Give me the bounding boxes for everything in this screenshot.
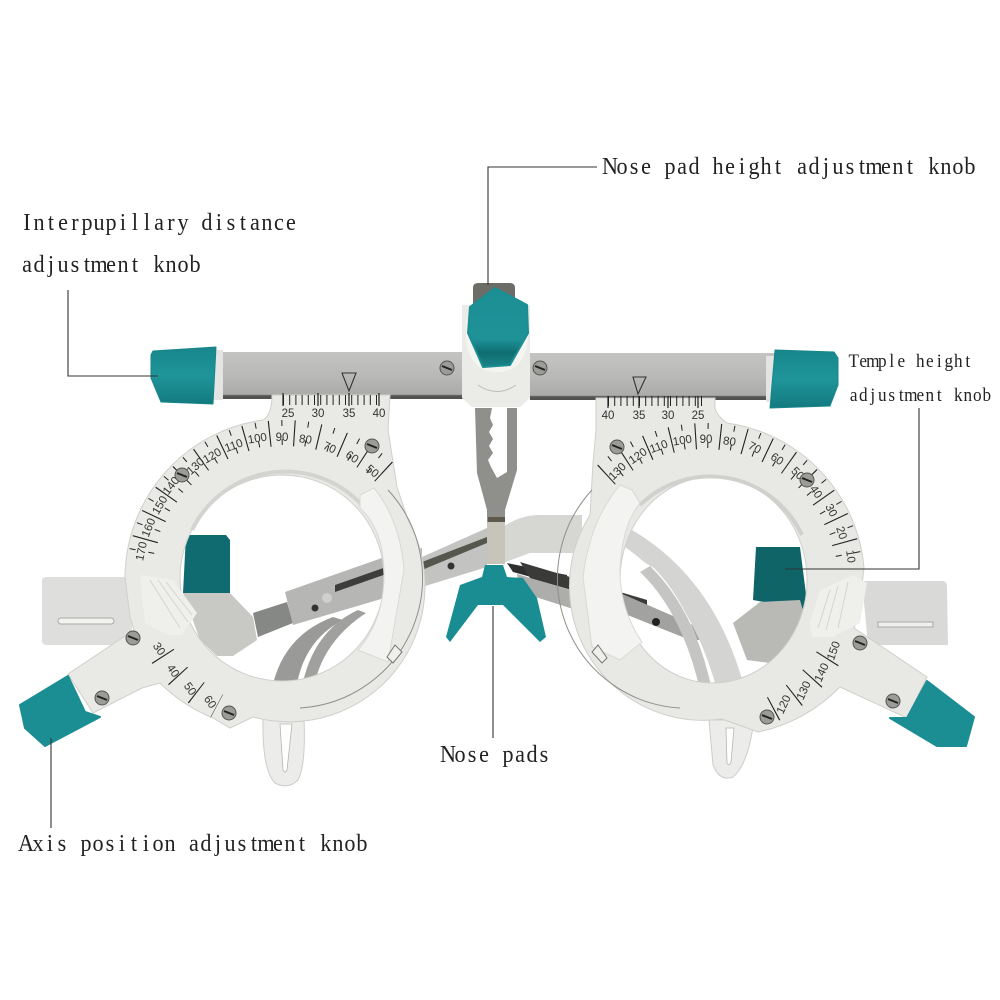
nose pad height pin xyxy=(473,283,515,305)
left axis scale numbers xyxy=(134,431,381,711)
knob: left interpupillary xyxy=(151,347,216,404)
left axis scale numbers: 130 xyxy=(185,456,207,478)
label: nose pads: Nose pads xyxy=(440,740,548,767)
right frame screws xyxy=(610,440,900,724)
right lens flap xyxy=(583,485,642,660)
right groove xyxy=(557,490,680,708)
right pupillary scale: 40 xyxy=(602,410,614,422)
left axis scale numbers: 110 xyxy=(223,437,245,455)
left lens frame xyxy=(68,373,425,728)
left pupillary scale: 25 xyxy=(282,408,294,420)
left inner rim shade xyxy=(192,472,370,530)
temple pad: right xyxy=(862,581,948,645)
left axis scale numbers: 100 xyxy=(247,431,268,447)
label: temple height adjustment knob: Temple height xyxy=(849,350,970,371)
right ribbed grip xyxy=(810,575,867,637)
bottom loop: right xyxy=(709,720,754,778)
knob: right temple xyxy=(770,350,838,408)
right axis scale numbers: 120 xyxy=(627,446,650,467)
right pupillary scale xyxy=(602,377,706,422)
left axis scale numbers: 70 xyxy=(321,440,338,456)
left lens flap xyxy=(358,488,404,662)
right axis scale numbers: 100 xyxy=(672,433,693,449)
right tilt knob behind lens xyxy=(733,547,810,663)
right scale ticks xyxy=(599,426,859,709)
left pupillary scale: 30 xyxy=(312,408,324,420)
right axis scale numbers: 120 xyxy=(775,694,794,716)
temple pad: left xyxy=(42,577,132,645)
left tilt knob behind lens xyxy=(183,535,257,656)
leader: axis position knob xyxy=(50,738,52,828)
label: interpupillary distance adjustment knob: adjustment knob xyxy=(22,250,201,277)
horizontal bar: right xyxy=(530,353,775,400)
left axis scale numbers: 60 xyxy=(201,694,218,711)
bridge arm linkage xyxy=(422,515,690,640)
label: temple height adjustment knob: adjustment knob xyxy=(850,384,991,405)
knob: right axis position xyxy=(890,681,974,746)
left axis scale numbers: 160 xyxy=(140,517,158,539)
label: interpupillary distance adjustment knob xyxy=(22,208,296,277)
nose pads xyxy=(446,565,546,642)
nose bracket xyxy=(462,305,530,407)
left frame plate xyxy=(68,395,425,728)
left ribbed grip xyxy=(140,575,197,635)
left pupillary scale: 40 xyxy=(373,408,385,420)
right axis scale numbers: 110 xyxy=(648,438,670,456)
left frame screws xyxy=(95,439,379,720)
left axis scale numbers: 60 xyxy=(343,449,360,466)
left scale ticks xyxy=(131,423,391,706)
right axis scale numbers: 80 xyxy=(722,435,737,449)
label: temple height adjustment knob xyxy=(849,350,991,405)
right axis scale numbers: 60 xyxy=(768,451,785,468)
right axis scale numbers: 40 xyxy=(807,484,824,501)
label: interpupillary distance adjustment knob: Interpupillary distance xyxy=(23,208,296,235)
left axis scale numbers: 120 xyxy=(201,446,224,466)
right axis scale numbers: 70 xyxy=(746,440,763,457)
right axis scale numbers: 30 xyxy=(822,502,839,519)
left axis scale numbers: 80 xyxy=(298,433,313,447)
right axis scale numbers: 90 xyxy=(700,434,712,446)
left axis scale numbers: 30 xyxy=(150,641,167,658)
left axis scale numbers: 170 xyxy=(134,541,150,562)
knob: left axis position xyxy=(20,676,100,746)
bottom loop: left xyxy=(263,718,304,786)
right axis scale numbers: 150 xyxy=(825,640,843,662)
nose fork xyxy=(475,408,517,564)
right inner rim shade xyxy=(640,476,802,535)
right lens frame xyxy=(557,377,927,732)
right axis scale numbers: 140 xyxy=(813,662,832,684)
right pupillary scale: 30 xyxy=(662,410,674,422)
right axis scale numbers: 50 xyxy=(788,465,806,483)
right clip xyxy=(592,645,607,663)
bar screws xyxy=(440,361,547,375)
leader: temple height knob xyxy=(785,408,919,569)
left axis scale numbers: 40 xyxy=(164,663,181,680)
left pupillary scale: 35 xyxy=(343,408,355,420)
knob: nose pad height star xyxy=(468,288,528,367)
label: nose pad height adjustment knob: Nose pad height adjustment knob xyxy=(602,152,976,179)
leader: nose pads xyxy=(492,606,494,738)
left groove xyxy=(300,490,423,708)
right frame plate xyxy=(569,398,927,732)
leader: interpupillary knob xyxy=(68,290,158,376)
left axis scale numbers: 90 xyxy=(276,432,288,444)
left pupillary scale xyxy=(282,373,385,420)
left axis scale numbers: 50 xyxy=(363,463,381,480)
right temple arm behind lens xyxy=(620,526,745,690)
left axis scale numbers: 140 xyxy=(161,475,182,497)
right axis scale numbers xyxy=(607,433,857,716)
right axis scale numbers: 130 xyxy=(607,461,629,483)
right axis scale numbers: 10 xyxy=(843,549,857,564)
left temple arm behind lens xyxy=(253,548,422,684)
horizontal bar: left xyxy=(215,352,465,399)
leader: nose pad height knob xyxy=(488,167,597,285)
right pupillary scale: 35 xyxy=(633,410,645,422)
label: axis position adjustment knob: Axis position adjustment knob xyxy=(18,829,368,856)
bar collars xyxy=(209,350,780,402)
right axis scale numbers: 130 xyxy=(795,680,814,702)
right axis scale numbers: 20 xyxy=(833,525,849,541)
left axis scale numbers: 50 xyxy=(181,681,198,698)
right pupillary scale: 25 xyxy=(692,410,704,422)
left clip xyxy=(387,645,402,663)
left axis scale numbers: 150 xyxy=(150,494,170,517)
